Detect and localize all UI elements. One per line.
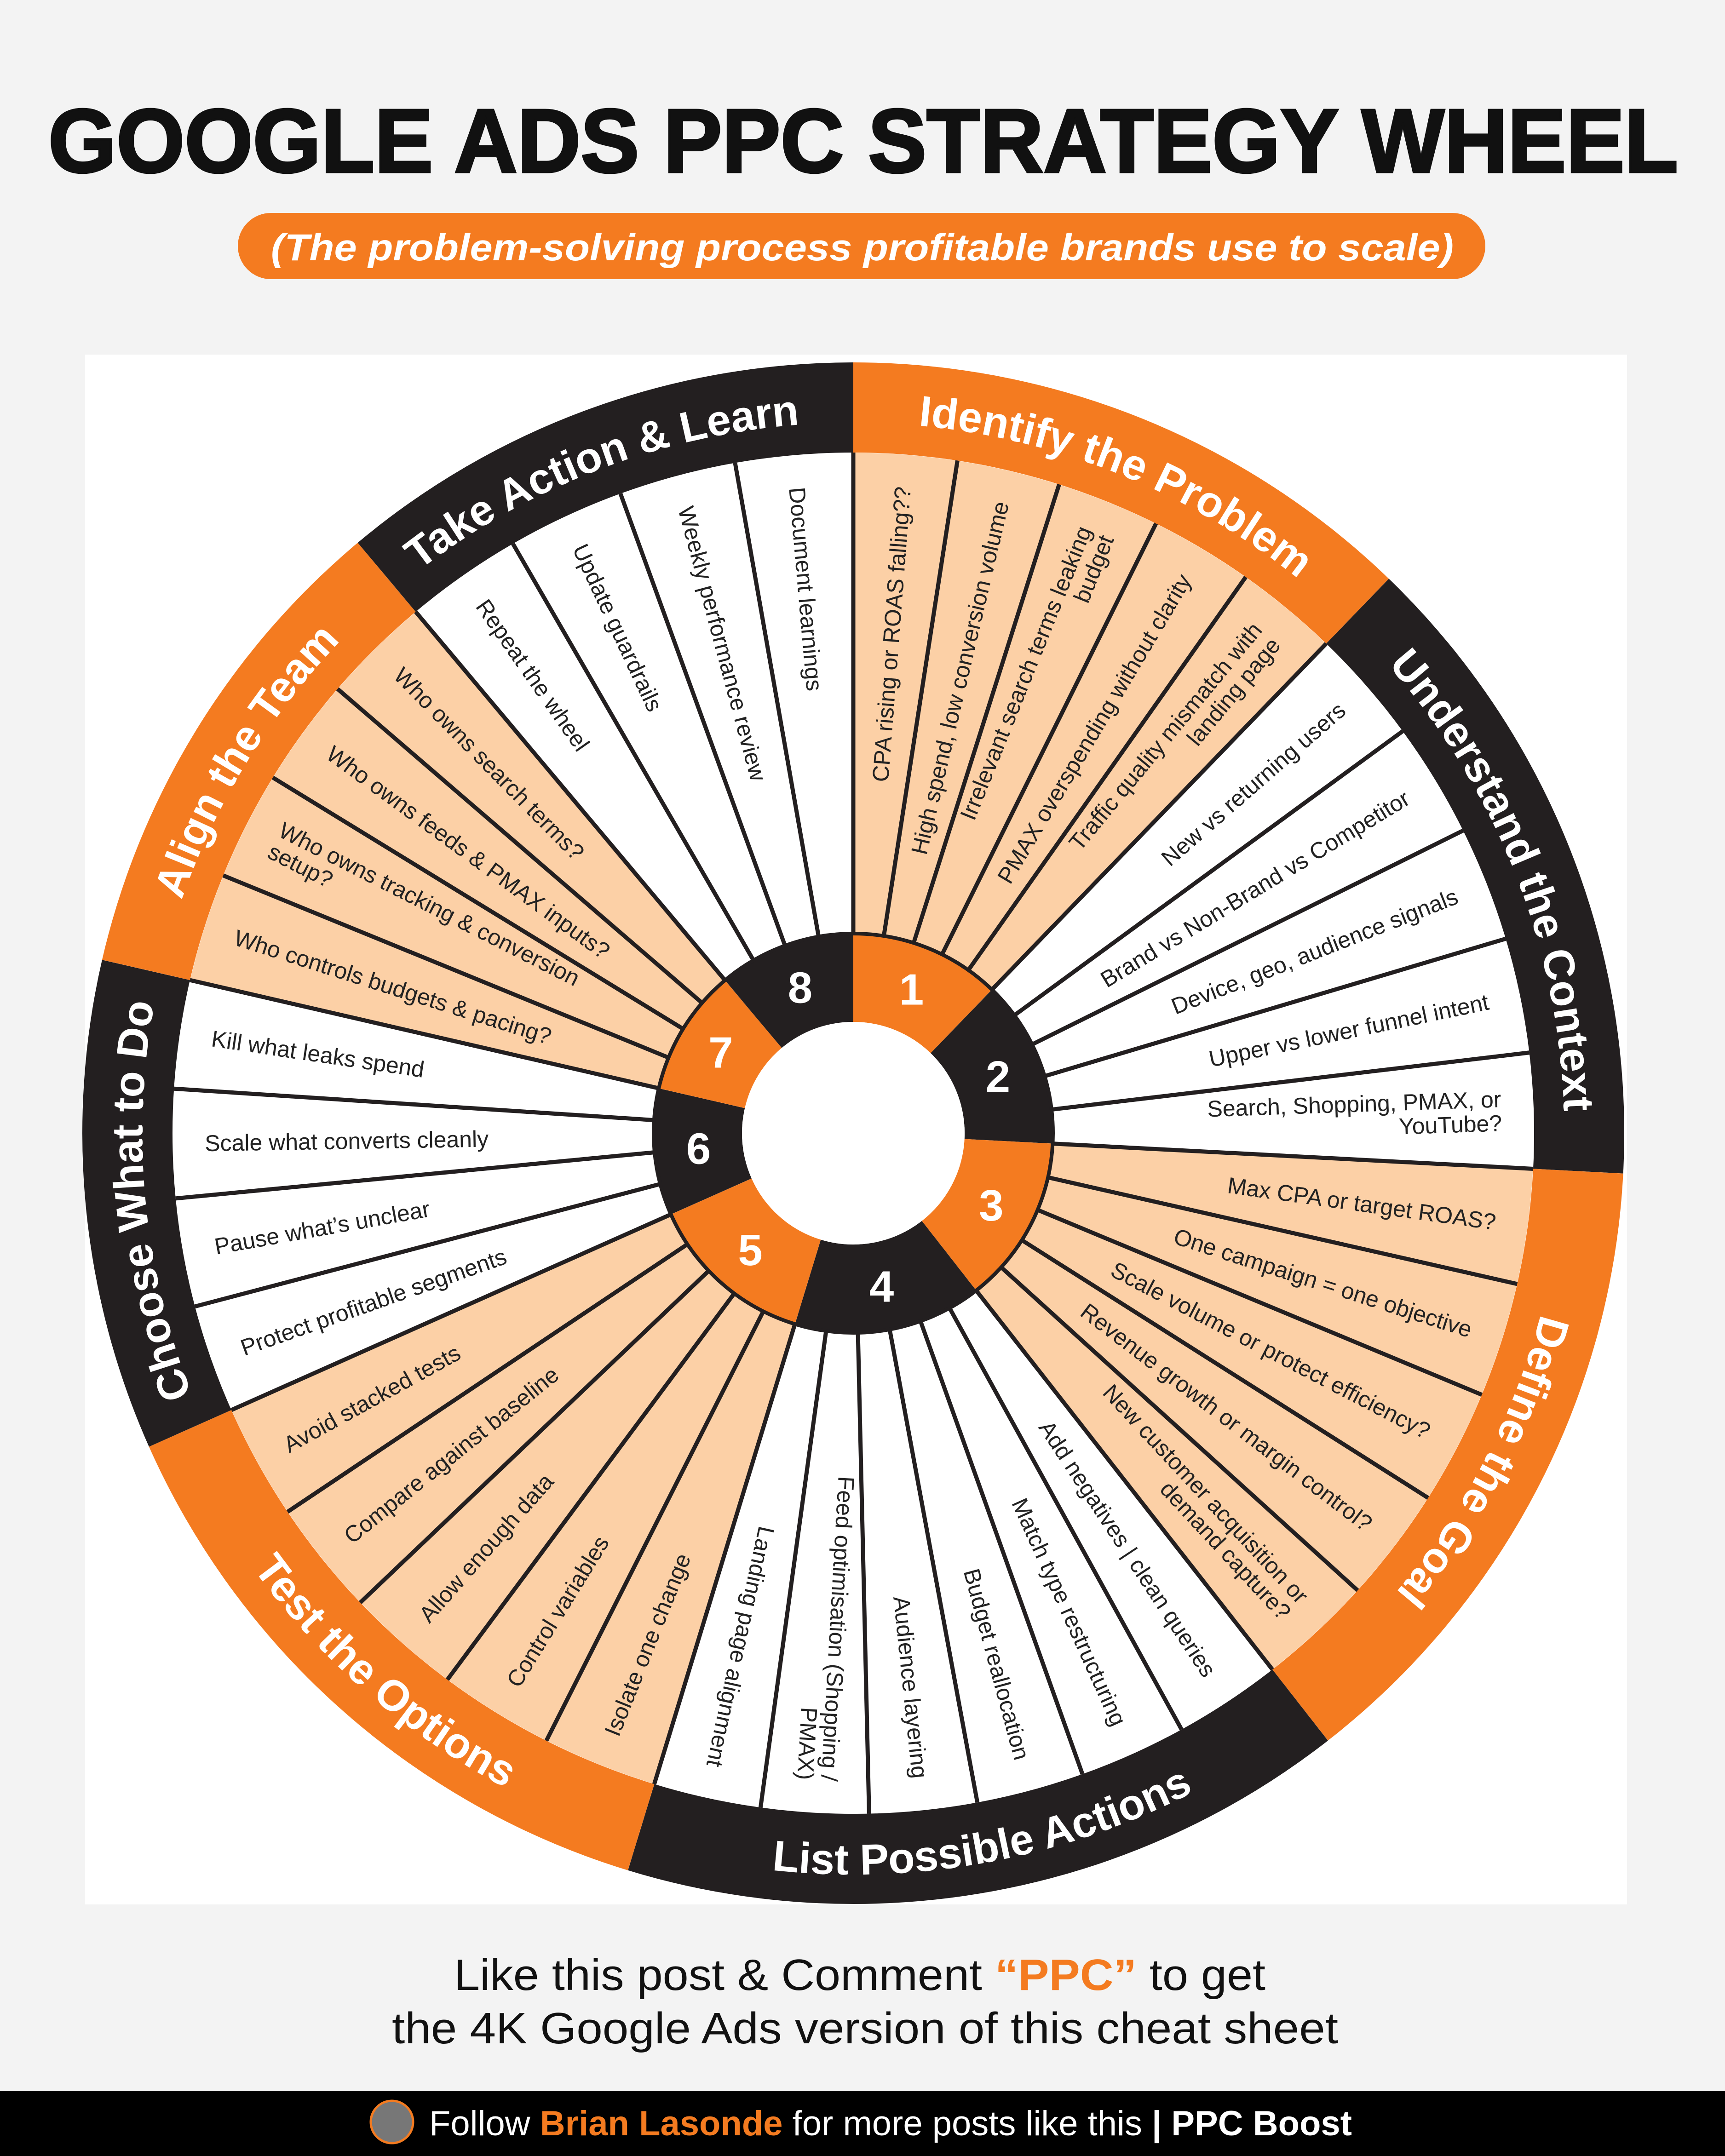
slice texts: right side (read outward): Search, Shopping, PMAX, or (1207, 1086, 1501, 1122)
subtitle pill: (The problem-solving process profitable brands use to scale) (271, 227, 1454, 269)
band labels: Identify the Problem (917, 387, 1322, 586)
slice texts: left side (read inward): Pause what’s unclear (213, 1196, 432, 1260)
slice texts: right side (read outward): demand capture? (1155, 1476, 1296, 1625)
hub numbers: 1 (899, 965, 924, 1015)
hub ring (633, 913, 1073, 1353)
slice texts: right side (read outward): Feed optimisation (Shopping / (816, 1475, 859, 1782)
slice texts: left side (read inward): Protect profitable segments (237, 1244, 510, 1361)
slice texts: left side (read inward): Compare against baseline (339, 1362, 564, 1548)
band labels (103, 385, 1603, 1884)
slice texts: right side (read outward): Match type restructuring (1006, 1494, 1132, 1730)
hub numbers: 3 (979, 1181, 1004, 1230)
slice texts: right side (read outward): One campaign = one objective (1171, 1223, 1475, 1342)
footer bar: Follow Brian Lasonde for more posts like this | PPC Boost (429, 2104, 1352, 2144)
band labels: Define the Goal (1389, 1311, 1579, 1618)
call to action text: the 4K Google Ads version of this cheat sheet (392, 2004, 1338, 2053)
title: GOOGLE ADS PPC STRATEGY WHEEL (48, 91, 1678, 191)
band labels: List Possible Actions (771, 1757, 1198, 1884)
slice texts: right side (read outward): Budget reallocation (959, 1566, 1035, 1763)
slice texts: right side (read outward): Revenue growth or margin control? (1075, 1298, 1377, 1537)
slice texts: right side (read outward): New vs returning users (1156, 697, 1351, 871)
slice texts: right side (read outward): Max CPA or target ROAS? (1226, 1172, 1497, 1235)
slice texts: left side (read inward): Repeat the wheel (471, 595, 594, 756)
slice texts: right side (read outward): Upper vs lower funnel intent (1207, 989, 1491, 1072)
hub numbers: 2 (986, 1052, 1010, 1101)
call to action text: Like this post & Comment “PPC” to get (454, 1950, 1265, 2000)
slice texts: right side (read outward): CPA rising or ROAS falling?? (868, 486, 916, 783)
band labels: Test the Options (246, 1545, 525, 1796)
slice texts: left side (read inward): Document learnings (784, 486, 828, 692)
footer bar (0, 2091, 1725, 2156)
slice texts: left side (read inward): Who owns search terms? (389, 662, 589, 865)
subtitle pill (238, 213, 1485, 279)
slice texts: right side (read outward): New customer acquisition or (1098, 1379, 1313, 1609)
slice texts: left side (read inward): Scale what converts cleanly (205, 1126, 489, 1156)
slice texts: left side (read inward): Kill what leaks spend (210, 1026, 426, 1083)
slice texts: right side (read outward): Irrelevant search terms leaking (955, 522, 1097, 824)
slice texts: right side (read outward): Audience layering (888, 1595, 933, 1779)
hub numbers: 7 (708, 1028, 733, 1077)
slice texts: right side (read outward): landing page (1182, 633, 1286, 751)
slice texts: left side (read inward): Avoid stacked tests (279, 1340, 465, 1458)
hub numbers: 4 (869, 1262, 894, 1311)
slice texts: left side (read inward): setup? (264, 838, 337, 893)
slice texts: right side (read outward): PMAX) (792, 1707, 822, 1781)
slice texts: right side (read outward): budget (1069, 531, 1119, 606)
slice texts: left side (read inward): Isolate one change (599, 1550, 696, 1740)
slice texts: right side (read outward): YouTube? (1398, 1110, 1502, 1140)
slice texts: right side (read outward): High spend, low conversion volume (906, 499, 1014, 857)
band labels: Understand the Context (1381, 639, 1603, 1112)
slice texts: right side (read outward) (702, 486, 1502, 1782)
slice texts: left side (read inward): Weekly performance review (673, 504, 771, 784)
slice texts: right side (read outward): Add negatives | clean queries (1034, 1416, 1221, 1682)
band labels: Take Action & Learn (396, 385, 800, 578)
hub numbers: 5 (738, 1226, 763, 1275)
slice texts: right side (read outward): Brand vs Non-Brand vs Competitor (1096, 786, 1414, 992)
slice texts: left side (read inward) (205, 486, 828, 1740)
hub numbers: 8 (788, 963, 812, 1012)
panel: wheel background (85, 355, 1627, 1904)
slice texts: left side (read inward): Who controls budgets & pacing? (231, 925, 555, 1049)
slice fills (231, 511, 1475, 1755)
slice texts: right side (read outward): Device, geo, audience signals (1168, 883, 1461, 1020)
slice texts: right side (read outward): Scale volume or protect efficiency? (1107, 1257, 1435, 1444)
slice texts: right side (read outward): PMAX overspending without clarity (992, 570, 1196, 888)
band labels: Align the Team (145, 614, 347, 903)
band labels: Choose What to Do (103, 997, 201, 1408)
slice texts: left side (read inward): Allow enough data (414, 1468, 558, 1628)
slice texts: left side (read inward): Update guardrails (568, 540, 667, 716)
call to action text (392, 1950, 1338, 2053)
slice texts: right side (read outward): Landing page alignment (702, 1524, 779, 1769)
slice texts: left side (read inward): Who owns tracking & conversion (275, 817, 584, 991)
slice texts: left side (read inward): Control variables (501, 1531, 614, 1692)
slice texts: right side (read outward): Traffic quality mismatch with (1064, 618, 1267, 855)
hub numbers: 6 (686, 1124, 711, 1173)
icon: avatar (371, 2101, 413, 2143)
slice texts: left side (read inward): Who owns feeds & PMAX inputs? (322, 741, 615, 964)
hub numbers (682, 955, 1027, 1316)
